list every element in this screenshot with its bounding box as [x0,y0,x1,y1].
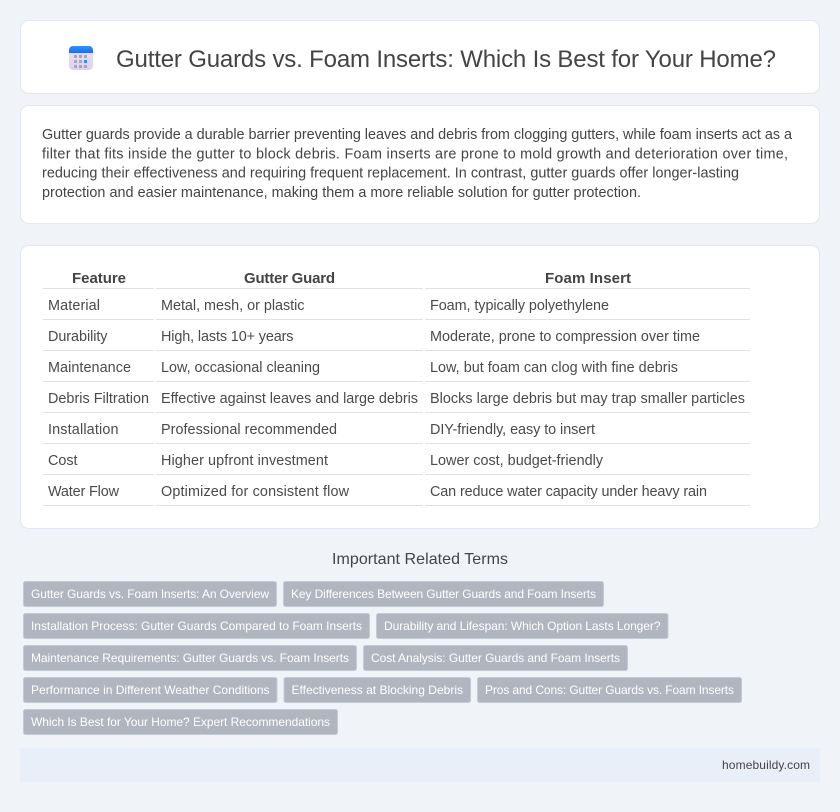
footer source: homebuildy.com [722,758,810,772]
tag: Cost Analysis: Gutter Guards and Foam Inserts [371,651,620,665]
panel: title header [20,20,820,94]
row: installation: Installation [48,422,118,438]
table header row: Feature [72,270,126,287]
row: water flow: Optimized for consistent flow [161,484,350,500]
tag: Key Differences Between Gutter Guards and Foam Inserts [291,587,596,601]
tag [24,710,338,734]
row: debris filtration [48,391,745,407]
row: cost [48,453,604,469]
tag: Pros and Cons: Gutter Guards vs. Foam Inserts [485,683,734,697]
text block: introduction paragraph: protection and easier maintenance, making them a more reliable solution for gutter protection. [42,185,641,201]
text block: introduction paragraph: filter that fits inside the gutter to block debris. Foam inserts are prone to mold growth and deterioration over time, [42,146,788,162]
tag [478,678,742,702]
row: cost: Higher upfront investment [161,453,328,469]
tag [284,678,470,702]
tag [24,582,276,606]
row: water flow: Water Flow [48,484,120,500]
tag [364,646,628,670]
tag: Performance in Different Weather Conditions [31,683,270,697]
row: debris filtration: Debris Filtration [48,391,149,407]
row: installation: DIY-friendly, easy to insert [430,422,595,438]
text block: introduction paragraph [42,127,792,201]
row: durability: Durability [48,329,108,345]
row: maintenance: Low, but foam can clog with fine debris [430,360,678,376]
tag [24,614,370,638]
table header row: Foam Insert [545,270,631,287]
title: Gutter Guards vs. Foam Inserts: Which Is Best for Your Home? [116,46,776,73]
tag: Gutter Guards vs. Foam Inserts: An Overview [31,587,269,601]
row: maintenance: Low, occasional cleaning [161,360,320,376]
tag: Which Is Best for Your Home? Expert Recommendations [31,715,330,729]
row: durability: High, lasts 10+ years [161,329,294,345]
row: maintenance [48,360,678,376]
row: durability [48,329,700,345]
row: installation: Professional recommended [161,422,337,438]
row: water flow: Can reduce water capacity under heavy rain [430,484,707,500]
tag: Installation Process: Gutter Guards Compared to Foam Inserts [31,619,362,633]
row: cost: Lower cost, budget-friendly [430,453,604,469]
row: water flow [48,484,707,500]
tag [284,582,604,606]
tag: Effectiveness at Blocking Debris [292,683,463,697]
row: debris filtration: Effective against leaves and large debris [161,391,418,407]
row: material: Metal, mesh, or plastic [161,298,304,314]
table header row: Gutter Guard [244,270,335,287]
tag [24,678,277,702]
tag: Durability and Lifespan: Which Option Lasts Longer? [384,619,661,633]
row: material: Material [48,298,100,314]
heading: important related terms: Important Related Terms [332,551,508,568]
related terms tags [24,582,742,734]
tag: Maintenance Requirements: Gutter Guards vs. Foam Inserts [31,651,349,665]
row: installation [48,422,595,438]
text block: introduction paragraph: reducing their effectiveness and requiring frequent replacement. In contrast, gutter guards offer longer-lasting [42,166,739,182]
row: material [48,298,609,314]
row: material: Foam, typically polyethylene [430,298,609,314]
row: debris filtration: Blocks large debris but may trap smaller particles [430,391,745,407]
row: maintenance: Maintenance [48,360,131,376]
tag [376,614,668,638]
row: durability: Moderate, prone to compression over time [430,329,700,345]
icon: calendar [69,46,93,70]
row: cost: Cost [48,453,78,469]
panel: introduction [20,106,820,224]
tag [24,646,356,670]
footer [20,748,820,782]
table header row [72,270,631,287]
panel: comparison table [20,246,820,528]
text block: introduction paragraph: Gutter guards provide a durable barrier preventing leaves and debris from clogging gutters, while foam inserts act as a [42,127,792,143]
